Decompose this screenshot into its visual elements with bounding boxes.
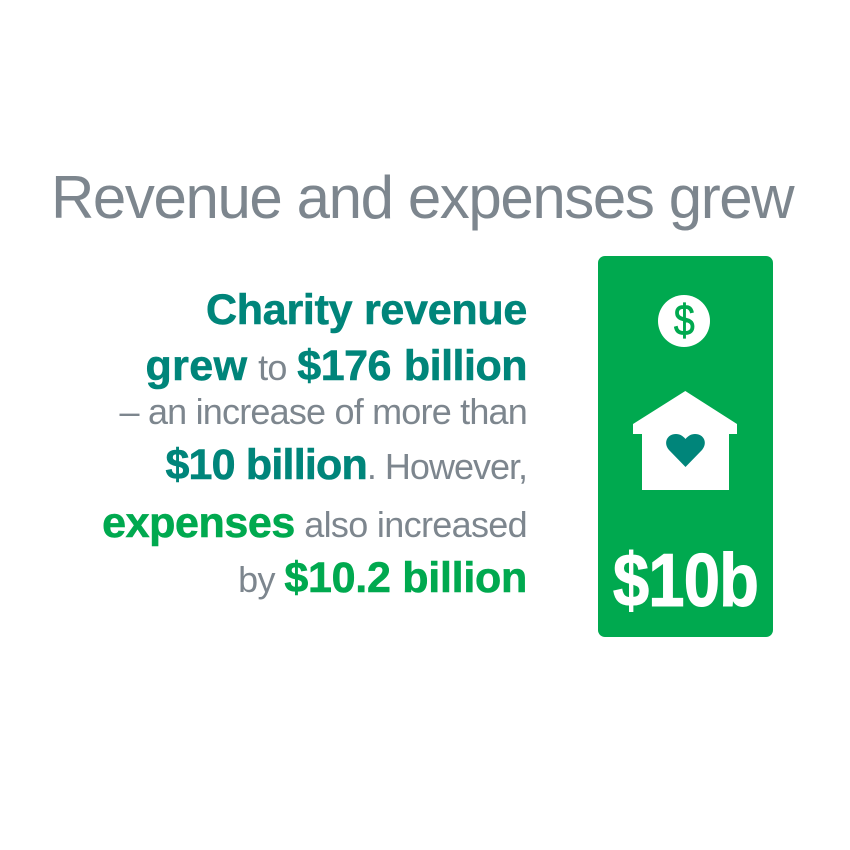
line 3: – an increase of more than [120,391,527,432]
line 4: $10 billion. However, [165,441,527,489]
line 1: Charity revenue [206,286,527,334]
title: Revenue and expenses grew [51,164,793,231]
icon: house with heart [633,391,737,490]
text block: revenue and expenses [102,286,527,602]
big value: $10b [613,538,758,622]
line 5: expenses also increased [102,499,527,547]
panel: green card [598,256,773,637]
icon: dollar coin: $ [674,296,694,345]
line 2: grew to $176 billion [146,342,527,390]
line 6: by $10.2 billion [238,554,527,602]
icon: dollar coin [658,295,710,347]
